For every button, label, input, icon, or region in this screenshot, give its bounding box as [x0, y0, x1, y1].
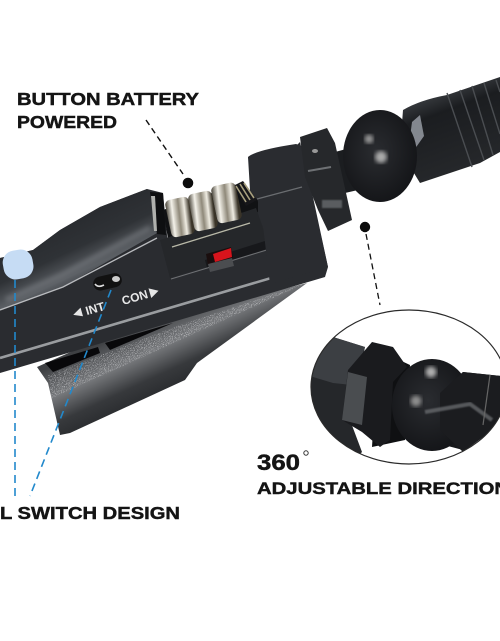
ball highlights: [364, 134, 374, 144]
callout: switch design: L SWITCH DESIGN: [0, 503, 180, 523]
switch label INT: [71, 299, 107, 322]
switch label CON: [120, 284, 160, 308]
callout: battery title: BUTTON BATTERY: [17, 89, 199, 109]
callout arrow: joint: [360, 222, 380, 305]
battery end cap: [150, 192, 166, 235]
callout: adjustable direction: ADJUSTABLE DIRECTION: [257, 479, 500, 498]
lens hose top: [440, 372, 500, 452]
device: main body: [0, 142, 328, 435]
lens hose: [449, 372, 500, 450]
switch label INT: INT: [84, 299, 107, 318]
lower fin: [37, 283, 307, 435]
callout: battery title: [17, 89, 199, 132]
switch label CON: CON: [120, 287, 150, 308]
switch: [92, 272, 123, 292]
callout arrow: battery: [146, 120, 193, 188]
lower edge line: [0, 263, 322, 358]
upper shell: [0, 189, 157, 310]
lens ball highlights: [426, 366, 436, 378]
lens hex nut: [342, 342, 407, 447]
fin slots: [45, 323, 173, 372]
lens body: [312, 338, 365, 454]
spring: [233, 181, 257, 206]
callout: battery title: POWERED: [17, 112, 117, 132]
red slider: [206, 247, 234, 272]
detail lens: joint close-up: [310, 309, 500, 465]
metal clip: [151, 196, 157, 231]
ball: [343, 110, 417, 202]
neck: [335, 148, 358, 193]
icon: blue button: [1, 248, 35, 281]
right housing: [248, 144, 328, 284]
hose ribs: [447, 80, 500, 167]
shell highlight: [6, 228, 150, 300]
lower recess panel: [160, 208, 270, 278]
hose: [400, 77, 500, 183]
lens ball: [392, 359, 461, 451]
body silhouette: [0, 142, 328, 373]
fin speckle: [48, 284, 304, 398]
ball joint and hose: [300, 77, 500, 231]
nut: [300, 128, 352, 231]
battery cells: [164, 182, 243, 238]
lens gap: [372, 362, 410, 447]
callout arrows: blue dashed: [15, 280, 111, 496]
recess back: [163, 184, 258, 250]
shell edge line: [0, 238, 157, 310]
callout: 360 degrees: 360: [257, 450, 300, 475]
hose glint: [407, 115, 424, 160]
